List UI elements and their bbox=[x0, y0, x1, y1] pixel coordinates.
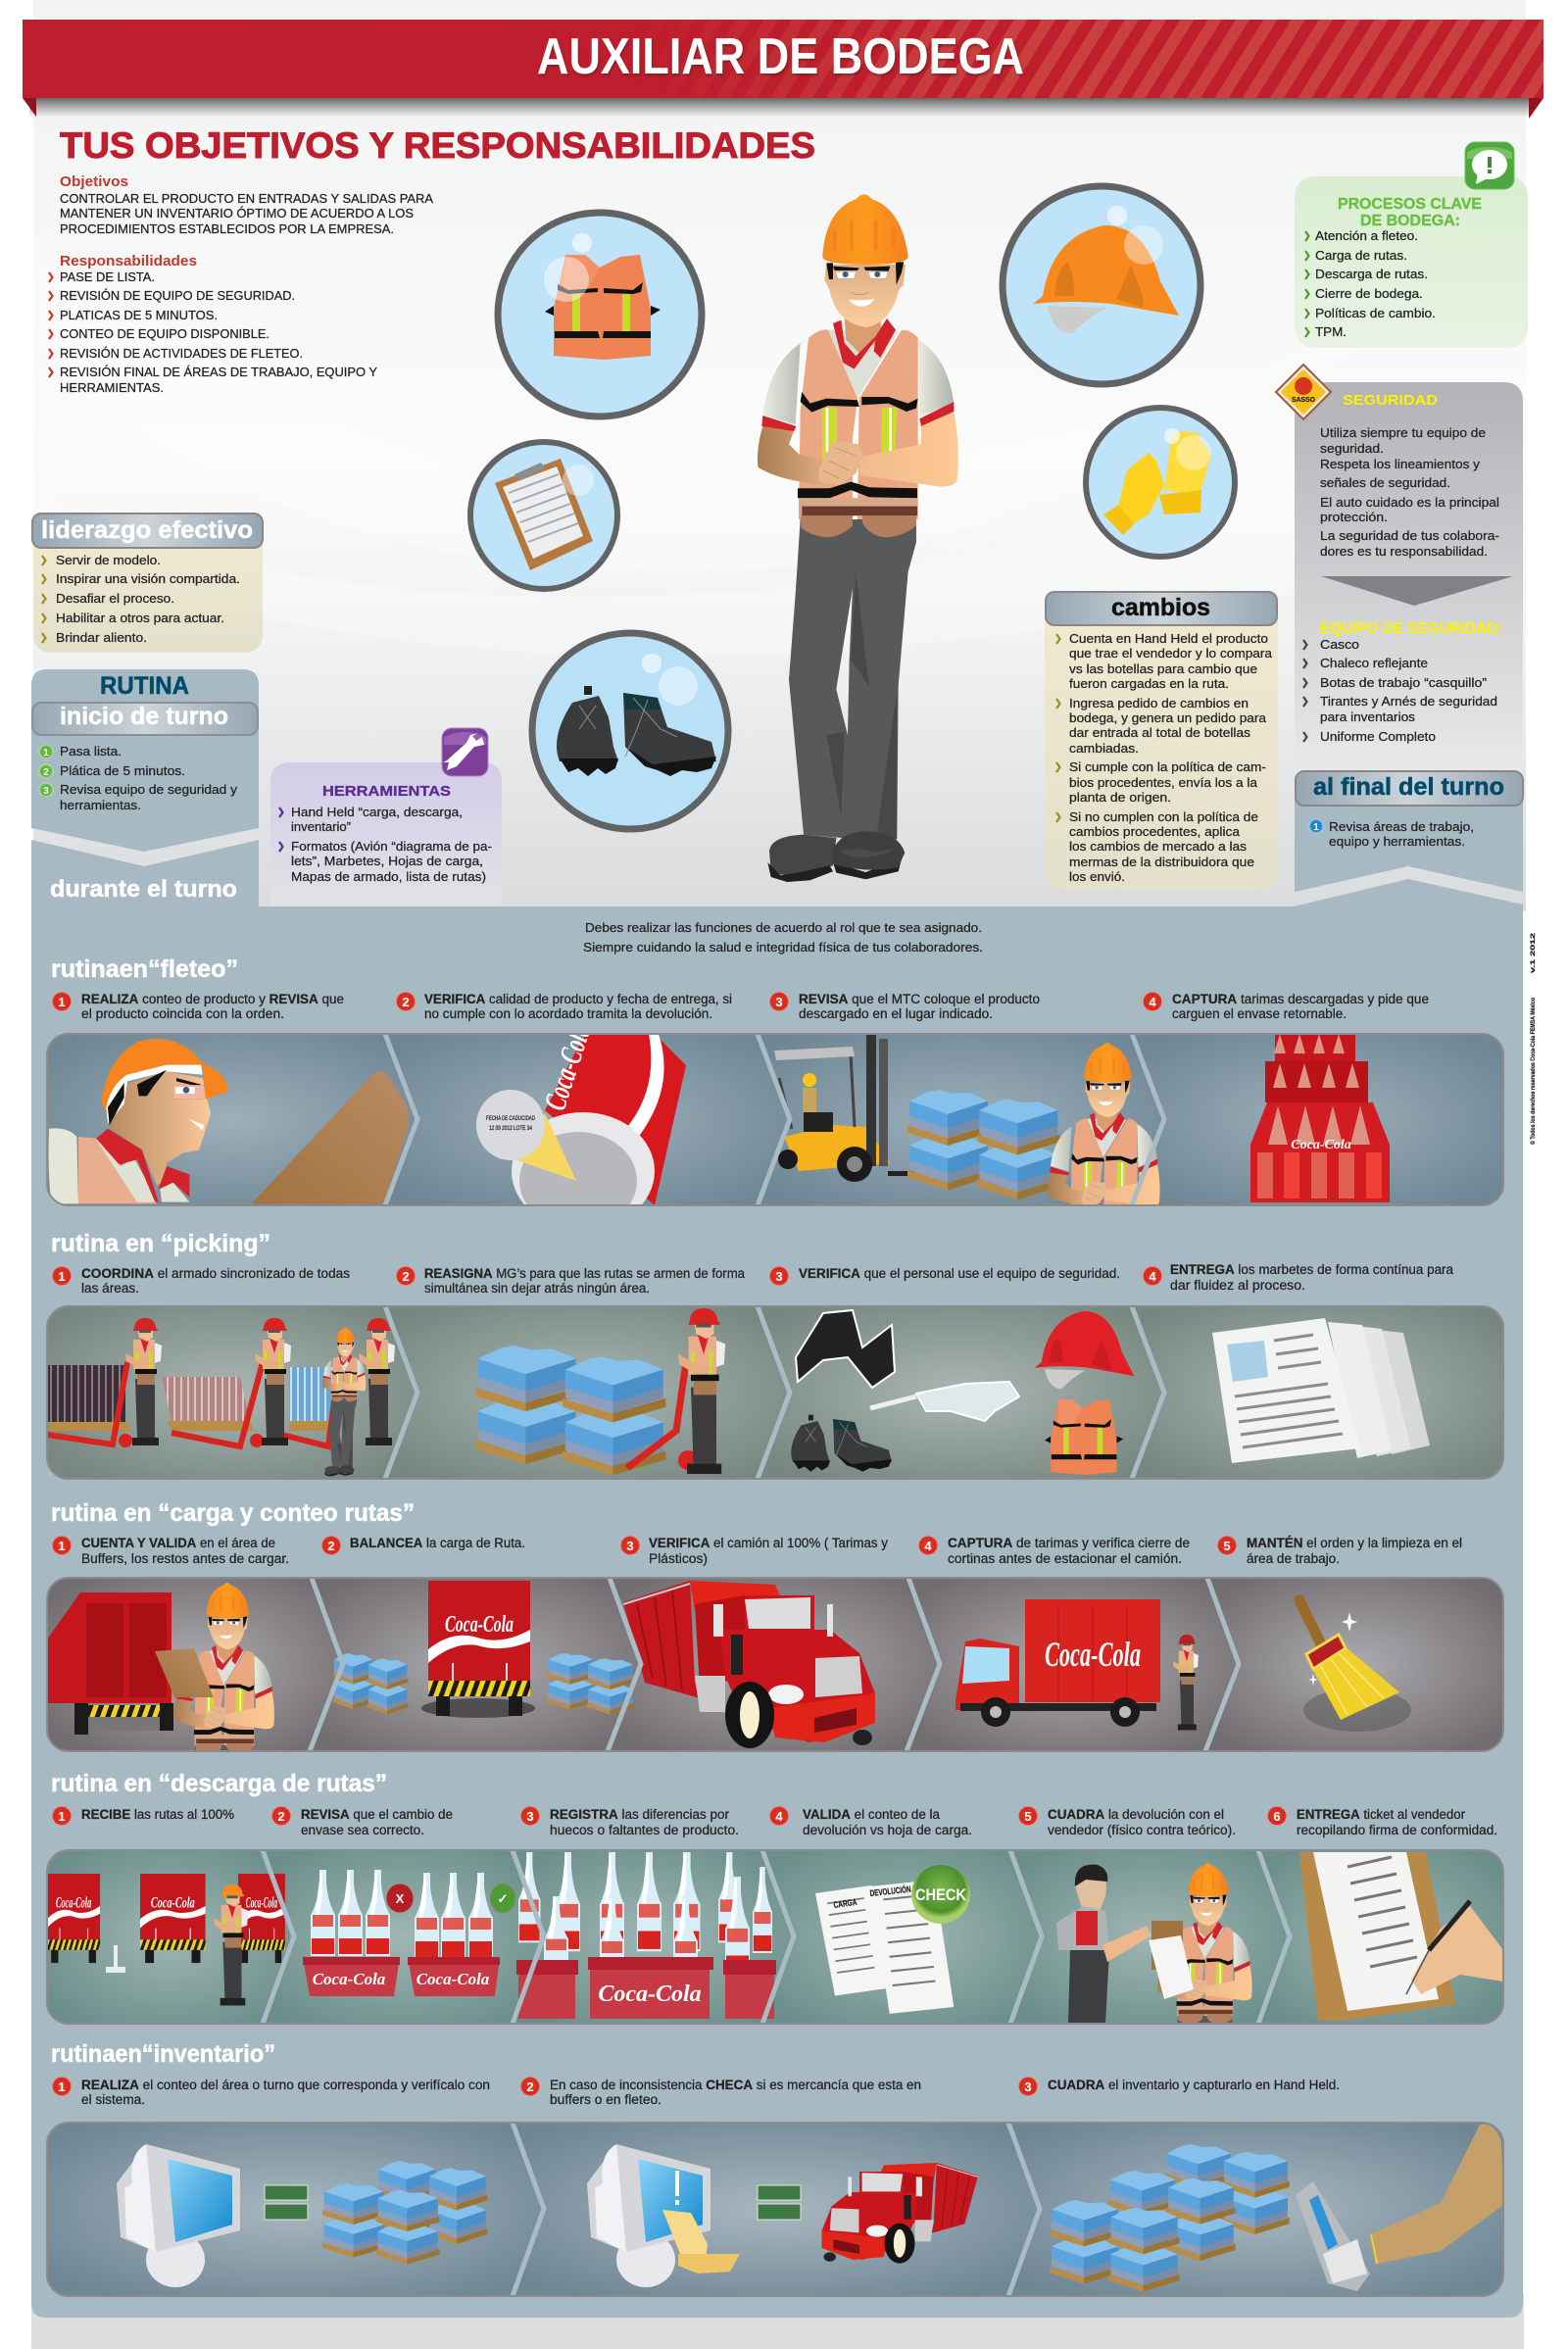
text block: objetivos: MANTENER UN INVENTARIO ÓPTIMO DE ACUERDO A LOS bbox=[60, 206, 414, 220]
text block: responsabilidades: CONTEO DE EQUIPO DISPONIBLE. bbox=[60, 326, 270, 341]
step 6 descarga: recopilando firma de conformidad. bbox=[1297, 1823, 1497, 1837]
text block: responsabilidades: REVISIÓN DE EQUIPO DE SEGURIDAD. bbox=[60, 288, 295, 303]
illustration: stacked crates bbox=[1250, 1034, 1390, 1202]
panel: al final del turno bbox=[1295, 771, 1523, 892]
panel: liderazgo efectivo: Servir de modelo. bbox=[56, 553, 161, 567]
panel: rutina inicio de turno: Revisa equipo de seguridad y bbox=[60, 782, 238, 797]
strip: picking illustrations bbox=[47, 1306, 1503, 1479]
heading: rutina: RUTINA bbox=[100, 672, 189, 700]
panel: cambios: Si no cumplen con la política de bbox=[1069, 809, 1258, 824]
arrow: seguridad to equipo bbox=[1321, 576, 1513, 606]
heading bar: inicio de turno bbox=[32, 703, 258, 735]
illustration: crates with missing bottles bbox=[516, 1852, 776, 2019]
text block: responsabilidades: PLATICAS DE 5 MINUTOS. bbox=[60, 308, 218, 322]
strip frame: picking separators bbox=[47, 1306, 1503, 1479]
step 3 carga: 3 bbox=[626, 1539, 634, 1553]
panel: cambios bbox=[1045, 592, 1278, 890]
panel: rutina inicio de turno: Pasa lista. bbox=[60, 744, 122, 759]
panel: liderazgo efectivo: Habilitar a otros para actuar. bbox=[56, 611, 224, 625]
illustration: bottles on crates with x and check: X bbox=[396, 1891, 405, 1906]
worker illustration bbox=[758, 194, 958, 882]
step 2 carga: 2 bbox=[327, 1539, 335, 1553]
step 2 fleteo: 2 bbox=[402, 995, 410, 1009]
illustration: truck rear and worker with clipboard bbox=[48, 1583, 274, 1750]
panel: cambios: planta de origen. bbox=[1069, 790, 1171, 805]
illustration: pallets, handheld and arm bbox=[1050, 2125, 1503, 2291]
panel: herramientas: Hand Held “carga, descarga, bbox=[291, 805, 463, 819]
panel: cambios: que trae el vendedor y lo compara bbox=[1069, 646, 1273, 661]
heading bar: al final del turno: al final del turno bbox=[1313, 773, 1504, 801]
section: rutina en inventario bbox=[47, 2040, 1503, 2296]
panel: procesos clave: Carga de rutas. bbox=[1315, 248, 1407, 263]
step 2 descarga bbox=[271, 1806, 453, 1837]
heading bar: liderazgo: liderazgo efectivo bbox=[41, 516, 253, 544]
illustration: documents and check badge: DEVOLUCIÓN bbox=[869, 1884, 911, 1898]
illustration: coca-cola can and date detail: FECHA DE CADUCIDAD bbox=[486, 1115, 535, 1122]
panel: procesos clave: Cierre de bodega. bbox=[1315, 286, 1423, 301]
step 5 carga: 5 bbox=[1223, 1539, 1231, 1553]
strip frame: inventario separators bbox=[47, 2123, 1503, 2296]
step 1 inventario bbox=[52, 2077, 490, 2107]
step 1 picking: COORDINA el armado sincronizado de todas bbox=[81, 1266, 350, 1281]
heading bar: cambios bbox=[1046, 592, 1277, 625]
step 2 carga bbox=[321, 1536, 525, 1555]
step 1 descarga bbox=[52, 1806, 234, 1826]
illustration: bottles on crates with x and check: Coca-Cola bbox=[313, 1970, 386, 1988]
step 1 carga bbox=[52, 1536, 289, 1566]
step 3 inventario bbox=[1018, 2077, 1340, 2096]
step 4 fleteo: CAPTURA tarimas descargadas y pide que bbox=[1172, 992, 1429, 1006]
heading: objetivos y responsabilidades: TUS OBJETIVOS Y RESPONSABILIDADES bbox=[60, 125, 815, 166]
step 3 inventario: CUADRA el inventario y capturarlo en Hand Held. bbox=[1048, 2078, 1340, 2092]
icon: boots in circle bbox=[532, 633, 728, 829]
illustration: trucks received with worker bbox=[47, 1874, 285, 2005]
step 4 carga: CAPTURA de tarimas y verifica cierre de bbox=[948, 1536, 1190, 1550]
illustration: pallets, jacks and workers bbox=[47, 1318, 395, 1476]
panel: cambios: los envió. bbox=[1069, 869, 1125, 884]
step 2 picking: 2 bbox=[402, 1269, 410, 1284]
banner title text: AUXILIAR DE BODEGA bbox=[537, 28, 1024, 85]
panel: procesos clave bbox=[1295, 142, 1528, 348]
panel: liderazgo efectivo: Inspirar una visión compartida. bbox=[56, 571, 240, 586]
panel: herramientas: HERRAMIENTAS bbox=[322, 783, 451, 800]
step 2 picking bbox=[396, 1266, 745, 1296]
step 3 descarga bbox=[520, 1806, 739, 1837]
panel: cambios: Cuenta en Hand Held el producto bbox=[1069, 631, 1268, 646]
icon: wrench bbox=[442, 728, 488, 776]
panel: herramientas: lets”, Marbetes, Hojas de carga, bbox=[291, 854, 483, 868]
text block: intro: Debes realizar las funciones de acuerdo al rol que te sea asignado. bbox=[585, 920, 982, 935]
icon: gloves in circle bbox=[1086, 408, 1235, 557]
illustration: worker close-up with clipboard bbox=[49, 1039, 409, 1203]
step 1 fleteo: el producto coincida con la orden. bbox=[81, 1006, 284, 1021]
heading: descarga: rutina en “descarga de rutas” bbox=[51, 1770, 387, 1797]
step 3 inventario: 3 bbox=[1024, 2080, 1032, 2094]
text block: intro bbox=[583, 920, 983, 954]
panel: cambios: bodega, y genera un pedido para bbox=[1069, 710, 1267, 725]
illustration: bottles on crates with x and check bbox=[303, 1870, 515, 1996]
step 2 descarga: envase sea correcto. bbox=[301, 1823, 424, 1837]
icon: helmet in circle bbox=[1003, 186, 1200, 384]
text block: objetivos: Objetivos bbox=[60, 173, 128, 190]
step 2 carga: BALANCEA la carga de Ruta. bbox=[350, 1536, 525, 1550]
panel: liderazgo efectivo bbox=[32, 514, 263, 653]
text block: responsabilidades: HERRAMIENTAS. bbox=[60, 380, 164, 395]
panel: al final del turno: 1 bbox=[1313, 822, 1319, 833]
step 3 fleteo: REVISA que el MTC coloque el producto bbox=[799, 992, 1040, 1006]
panel: seguridad bbox=[1276, 365, 1523, 774]
strip: carga illustrations bbox=[48, 1579, 1502, 1750]
panel: rutina inicio de turno bbox=[31, 669, 259, 852]
step 4 carga: cortinas antes de estacionar el camión. bbox=[948, 1551, 1182, 1566]
step 2 fleteo: VERIFICA calidad de producto y fecha de entrega, si bbox=[424, 992, 732, 1006]
step 5 descarga bbox=[1018, 1806, 1236, 1837]
step 4 carga: 4 bbox=[924, 1539, 932, 1553]
step 3 picking: VERIFICA que el personal use el equipo de seguridad. bbox=[799, 1266, 1120, 1281]
step 1 inventario: REALIZA el conteo del área o turno que corresponda y verifícalo con bbox=[81, 2078, 490, 2092]
panel: cambios: Ingresa pedido de cambios en bbox=[1069, 696, 1249, 710]
illustration: coca-cola can and date detail: Coca-Cola bbox=[536, 1019, 597, 1114]
heading: carga: rutina en “carga y conteo rutas” bbox=[51, 1499, 415, 1527]
illustration: stacked crates: Coca-Cola bbox=[1291, 1138, 1351, 1152]
section: rutina en carga y conteo rutas bbox=[46, 1503, 1504, 1752]
text block: responsabilidades: PASE DE LISTA. bbox=[60, 269, 155, 284]
step 1 carga: 1 bbox=[58, 1539, 66, 1553]
step 3 picking: 3 bbox=[775, 1269, 783, 1284]
panel: herramientas: Mapas de armado, lista de rutas) bbox=[291, 869, 486, 884]
icon: alert speech bubble bbox=[1465, 142, 1514, 189]
step 4 picking bbox=[1143, 1262, 1453, 1293]
illustration: coca-cola can and date detail bbox=[476, 1035, 686, 1204]
icon: SASSO diamond: SASSO bbox=[1292, 397, 1316, 404]
illustration: balanced pallets at truck rear bbox=[333, 1581, 634, 1718]
panel: cambios: mermas de la distribuidora que bbox=[1069, 855, 1254, 869]
step 4 descarga: VALIDA el conteo de la bbox=[803, 1807, 940, 1822]
panel: procesos clave: TPM. bbox=[1315, 324, 1347, 339]
step 3 carga bbox=[620, 1536, 888, 1566]
step 2 descarga: 2 bbox=[277, 1809, 285, 1824]
step 4 picking: 4 bbox=[1149, 1269, 1156, 1284]
panel: seguridad: Respeta los lineamientos y bbox=[1320, 457, 1481, 471]
text block: intro: Siempre cuidando la salud e integridad física de tus colaboradores. bbox=[583, 940, 983, 954]
panel: cambios: cambiadas. bbox=[1069, 741, 1139, 756]
illustration: marbetes documents bbox=[1212, 1318, 1430, 1463]
panel: procesos clave: Políticas de cambio. bbox=[1315, 306, 1436, 320]
step 2 inventario bbox=[520, 2077, 921, 2107]
panel: procesos clave: Atención a fleteo. bbox=[1315, 228, 1418, 243]
step 5 descarga: 5 bbox=[1024, 1809, 1032, 1824]
panel: cambios: vs las botellas para cambio que bbox=[1069, 661, 1257, 676]
title banner bbox=[23, 20, 1544, 119]
step 2 fleteo bbox=[396, 992, 732, 1021]
panel: cambios: bios procedentes, envía los a la bbox=[1069, 775, 1258, 790]
step 4 fleteo: 4 bbox=[1149, 995, 1156, 1009]
panel: cambios: dar entrada al total de botellas bbox=[1069, 725, 1251, 740]
illustration: coca-cola can and date detail: 12 09 2012 LOTE 34 bbox=[489, 1125, 532, 1132]
step 4 carga bbox=[918, 1536, 1190, 1566]
section: rutina en fleteo bbox=[46, 958, 1504, 1206]
step 5 descarga: CUADRA la devolución con el bbox=[1048, 1807, 1224, 1822]
step 4 picking: ENTREGA los marbetes de forma contínua para bbox=[1170, 1262, 1453, 1277]
strip: descarga illustrations bbox=[48, 1851, 1502, 2023]
step 5 carga: MANTÉN el orden y la limpieza en el bbox=[1247, 1536, 1462, 1550]
strip frame: carga separators bbox=[47, 1578, 1503, 1751]
step 3 descarga: REGISTRA las diferencias por bbox=[550, 1807, 729, 1822]
step 3 fleteo: descargado en el lugar indicado. bbox=[799, 1006, 993, 1021]
panel: rutina inicio de turno: Plática de 5 minutos. bbox=[60, 763, 185, 778]
step 1 inventario: 1 bbox=[58, 2080, 66, 2094]
heading bar: inicio de turno: inicio de turno bbox=[60, 703, 228, 730]
step 2 inventario: buffers o en fleteo. bbox=[550, 2092, 662, 2107]
illustration: truck side with driver bbox=[956, 1599, 1199, 1731]
step 2 inventario: 2 bbox=[526, 2080, 534, 2094]
step 1 inventario: el sistema. bbox=[81, 2092, 145, 2107]
panel: seguridad: La seguridad de tus colabora- bbox=[1320, 528, 1499, 543]
step 4 picking: dar fluidez al proceso. bbox=[1170, 1278, 1305, 1293]
illustration: truck side with driver: Coca-Cola bbox=[1045, 1635, 1141, 1674]
panel: rutina inicio de turno: 1 bbox=[43, 748, 49, 759]
illustration: pallets and worker with jack bbox=[475, 1308, 725, 1475]
panel: seguridad: Uniforme Completo bbox=[1320, 729, 1436, 744]
illustration: crates with missing bottles: Coca-Cola bbox=[598, 1982, 702, 2007]
step 1 carga: CUENTA Y VALIDA en el área de bbox=[81, 1536, 275, 1550]
panel: rutina inicio de turno: herramientas. bbox=[60, 798, 141, 812]
panel: seguridad: Casco bbox=[1320, 637, 1359, 652]
copyright vertical note: © Todos los derechos reservados Coca-Cola FEMSA México bbox=[1529, 998, 1537, 1145]
section: rutina en picking bbox=[47, 1230, 1503, 1479]
icon: vest in circle bbox=[498, 213, 702, 416]
illustration: broom bbox=[1299, 1600, 1411, 1732]
strip frame: fleteo separators bbox=[47, 1034, 1503, 1205]
panel: seguridad: protección. bbox=[1320, 510, 1388, 524]
illustration: large delivery truck bbox=[623, 1581, 875, 1748]
step 3 picking bbox=[769, 1266, 1120, 1286]
text block: objetivos: CONTROLAR EL PRODUCTO EN ENTRADAS Y SALIDAS PARA bbox=[60, 191, 433, 206]
step 3 fleteo: 3 bbox=[775, 995, 783, 1009]
panel: seguridad: Botas de trabajo “casquillo” bbox=[1320, 675, 1487, 690]
page background panel bbox=[33, 0, 1526, 911]
step 1 carga: Buffers, los restos antes de cargar. bbox=[81, 1551, 289, 1566]
step 6 descarga bbox=[1267, 1806, 1497, 1837]
step 1 descarga: RECIBE las rutas al 100% bbox=[81, 1807, 234, 1822]
panel: herramientas: inventario” bbox=[291, 819, 351, 834]
panel: al final del turno: equipo y herramientas. bbox=[1329, 834, 1465, 849]
text block: objetivos bbox=[60, 173, 433, 236]
panel: seguridad: Utiliza siempre tu equipo de bbox=[1320, 425, 1486, 440]
illustration: documents and check badge: CHECK bbox=[915, 1885, 967, 1904]
step 1 picking: 1 bbox=[58, 1269, 66, 1284]
step 3 descarga: 3 bbox=[526, 1809, 534, 1824]
illustration: worker and vendor reconciling bbox=[1056, 1863, 1252, 2023]
text block: responsabilidades bbox=[49, 253, 377, 395]
panel: rutina inicio de turno: 3 bbox=[43, 786, 49, 797]
text block: responsabilidades: Responsabilidades bbox=[60, 253, 197, 269]
illustration: monitor with printout equals truck bbox=[587, 2144, 978, 2287]
panel: seguridad: SEGURIDAD bbox=[1343, 392, 1438, 409]
panel: cambios: Si cumple con la política de cam- bbox=[1069, 759, 1266, 774]
step 1 fleteo: REALIZA conteo de producto y REVISA que bbox=[81, 992, 344, 1006]
panel: durante el turno, main blue area bbox=[31, 840, 1524, 2349]
illustration: clipboard and signing hand bbox=[1299, 1852, 1503, 2021]
step 3 carga: VERIFICA el camión al 100% ( Tarimas y bbox=[649, 1536, 888, 1550]
illustration: documents and check badge: CARGA bbox=[833, 1897, 858, 1910]
panel: herramientas bbox=[270, 728, 502, 907]
panel: seguridad: EQUIPO DE SEGURIDAD: bbox=[1320, 620, 1502, 637]
strip: inventario illustrations bbox=[47, 2123, 1503, 2296]
text block: objetivos: PROCEDIMIENTOS ESTABLECIDOS POR LA EMPRESA. bbox=[60, 221, 394, 236]
panel: seguridad: señales de seguridad. bbox=[1320, 475, 1450, 490]
step 3 carga: Plásticos) bbox=[649, 1551, 708, 1566]
heading: durante el turno: durante el turno bbox=[50, 876, 237, 903]
step 1 picking: las áreas. bbox=[81, 1281, 139, 1296]
step 6 descarga: ENTREGA ticket al vendedor bbox=[1297, 1807, 1465, 1822]
panel: liderazgo efectivo: Desafiar el proceso. bbox=[56, 591, 174, 606]
step 2 descarga: REVISA que el cambio de bbox=[301, 1807, 453, 1822]
panel: cambios: cambios procedentes, aplica bbox=[1069, 824, 1241, 839]
panel: herramientas: Formatos (Avión “diagrama de pa- bbox=[291, 839, 492, 854]
panel: seguridad: Chaleco reflejante bbox=[1320, 656, 1428, 670]
panel: procesos clave: PROCESOS CLAVE bbox=[1338, 196, 1482, 213]
step 2 inventario: En caso de inconsistencia CHECA si es mercancía que esta en bbox=[550, 2078, 921, 2092]
step 6 descarga: 6 bbox=[1273, 1809, 1281, 1824]
icon: SASSO diamond bbox=[1276, 365, 1331, 419]
heading bar: cambios: cambios bbox=[1111, 594, 1210, 621]
step 1 picking bbox=[52, 1266, 350, 1296]
illustration: bottles on crates with x and check: ✓ bbox=[498, 1891, 508, 1906]
step 4 descarga bbox=[769, 1806, 972, 1837]
step 2 picking: simultánea sin dejar atrás ningún área. bbox=[424, 1281, 650, 1296]
heading bar: al final del turno bbox=[1296, 771, 1523, 806]
step 1 descarga: 1 bbox=[58, 1809, 66, 1824]
step 4 descarga: 4 bbox=[775, 1809, 783, 1824]
icon: clipboard in circle bbox=[470, 442, 617, 589]
strip frame: descarga separators bbox=[47, 1850, 1503, 2024]
section: rutina en descarga de rutas bbox=[46, 1774, 1504, 2025]
step 4 fleteo: carguen el envase retornable. bbox=[1172, 1006, 1347, 1021]
step 5 descarga: vendedor (físico contra teórico). bbox=[1048, 1823, 1236, 1837]
copyright vertical note: v.1 2012 bbox=[1530, 932, 1537, 973]
panel: liderazgo efectivo: Brindar aliento. bbox=[56, 630, 147, 645]
text block: responsabilidades: REVISIÓN DE ACTIVIDADES DE FLETEO. bbox=[60, 346, 303, 361]
panel: seguridad: dores es tu responsabilidad. bbox=[1320, 544, 1488, 559]
step 5 carga: área de trabajo. bbox=[1247, 1551, 1340, 1566]
step 1 fleteo: 1 bbox=[58, 995, 66, 1009]
step 5 carga bbox=[1217, 1536, 1462, 1566]
illustration: forklift, pallets, worker bbox=[774, 1035, 1160, 1204]
heading: fleteo: rutinaen“fleteo” bbox=[51, 955, 238, 983]
panel: rutina inicio de turno: 2 bbox=[43, 767, 49, 778]
panel: seguridad: Tirantes y Arnés de seguridad bbox=[1320, 694, 1497, 709]
panel: procesos clave: DE BODEGA: bbox=[1360, 213, 1460, 229]
strip: fleteo illustrations bbox=[48, 1035, 1502, 1204]
illustration: safety equipment bbox=[791, 1310, 1134, 1475]
step 2 picking: REASIGNA MG’s para que las rutas se armen de forma bbox=[424, 1266, 745, 1281]
step 3 descarga: huecos o faltantes de producto. bbox=[550, 1823, 739, 1837]
panel: seguridad: para inventarios bbox=[1320, 710, 1416, 724]
step 1 fleteo bbox=[52, 992, 344, 1021]
step 4 descarga: devolución vs hoja de carga. bbox=[803, 1823, 972, 1837]
panel: seguridad: seguridad. bbox=[1320, 441, 1384, 456]
panel: al final del turno: Revisa áreas de trabajo, bbox=[1329, 819, 1474, 834]
panel: cambios: fueron cargadas en la ruta. bbox=[1069, 676, 1229, 691]
panel: procesos clave: Descarga de rutas. bbox=[1315, 267, 1428, 281]
heading: picking: rutina en “picking” bbox=[51, 1230, 270, 1257]
illustration: monitor equals pallets bbox=[117, 2144, 487, 2287]
panel: seguridad: El auto cuidado es la principal bbox=[1320, 495, 1499, 510]
text block: responsabilidades: REVISIÓN FINAL DE ÁREAS DE TRABAJO, EQUIPO Y bbox=[60, 365, 377, 379]
step 2 fleteo: no cumple con lo acordado tramita la devolución. bbox=[424, 1006, 712, 1021]
panel: cambios: los cambios de mercado a las bbox=[1069, 839, 1248, 854]
step 3 fleteo bbox=[769, 992, 1040, 1021]
step 4 fleteo bbox=[1143, 992, 1429, 1021]
illustration: documents and check badge bbox=[815, 1865, 970, 2015]
illustration: bottles on crates with x and check: Coca-Cola bbox=[416, 1970, 490, 1988]
heading: inventario: rutinaen“inventario” bbox=[51, 2040, 275, 2068]
